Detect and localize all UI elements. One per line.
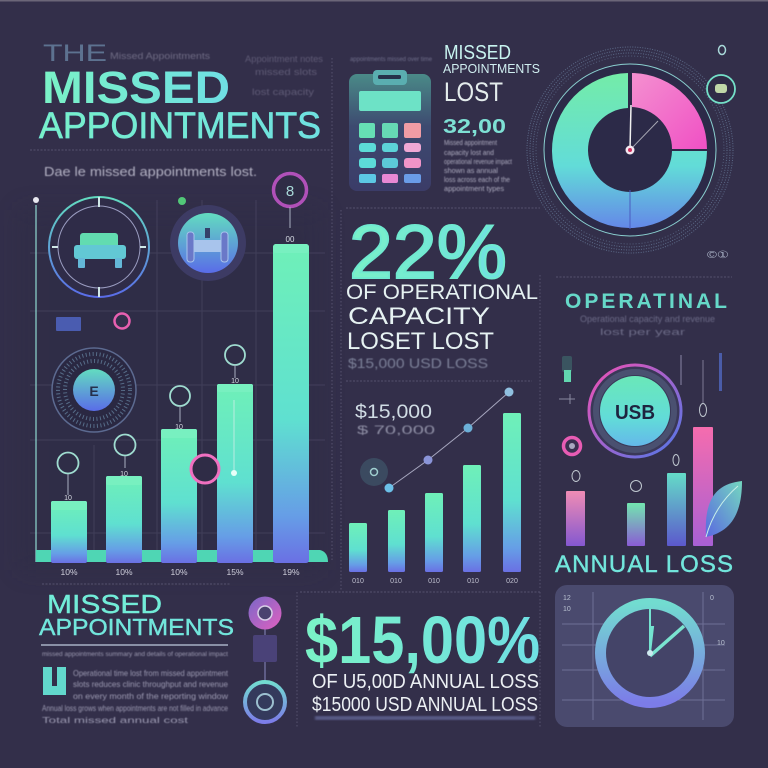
icon: chair badge <box>170 205 246 281</box>
body text bottom left: slots reduces clinic throughput and revenue <box>73 679 228 689</box>
statistic caption: OF OPERATIONAL <box>346 281 538 304</box>
line and bar chart: 010 <box>352 578 364 585</box>
title: MISSED <box>42 62 230 113</box>
body text: loss details: appointment types <box>444 184 504 193</box>
body text bottom left: Operational time lost from missed appointment <box>73 668 229 678</box>
heading: missed appointments bottom: MISSED <box>47 589 162 619</box>
statistic caption: LOSET LOST <box>347 328 494 355</box>
heading: missed appointments lost: 32,00 <box>443 116 506 138</box>
pink ring marker <box>191 455 219 483</box>
axis node <box>33 197 39 203</box>
icon: pink ring small <box>114 314 130 328</box>
statistic caption <box>346 281 538 355</box>
icon: leaf <box>706 481 742 537</box>
timeline icons <box>245 596 285 722</box>
statistic: 22%: 22% <box>349 210 507 295</box>
bar 1: 10 <box>64 495 72 502</box>
icon: u block <box>43 667 66 695</box>
icon: pink token <box>564 438 580 454</box>
clock face <box>600 604 700 702</box>
clock panel: 12 <box>563 595 571 602</box>
clock panel: 10 <box>563 606 571 613</box>
heading: missed appointments bottom <box>39 589 234 640</box>
bar 1 <box>51 452 87 563</box>
statistic caption bottom <box>312 671 539 716</box>
axis labels: 19% <box>282 567 300 577</box>
axis labels: 10% <box>170 567 188 577</box>
statistic caption bottom: OF U5,00D ANNUAL LOSS <box>312 671 539 693</box>
title <box>39 40 321 146</box>
heading: operatinal: OPERATINAL <box>565 290 727 313</box>
body text: loss details: capacity lost and <box>444 148 494 157</box>
axis labels: 15% <box>226 567 244 577</box>
faded loss note: $15,000 USD LOSS <box>348 355 488 371</box>
body text bottom left: missed appointments summary and details of operational impact <box>42 652 228 658</box>
line and bar chart <box>349 388 521 585</box>
body text: loss details <box>444 138 513 193</box>
icon: dotted dial: E <box>89 383 99 399</box>
body text: loss details: shown as annual <box>444 166 498 175</box>
calculator caption: appointments missed over time <box>350 57 433 63</box>
usd medallion <box>589 365 681 457</box>
heading: missed appointments lost: LOST <box>444 77 503 107</box>
line and bar chart: 010 <box>467 578 479 585</box>
bar 5: 00 <box>286 235 295 244</box>
bar 4: 10 <box>231 378 239 385</box>
bar 3 <box>161 386 197 563</box>
line and bar chart: 020 <box>506 578 518 585</box>
bar 4 <box>217 345 253 563</box>
donut segment: pink share <box>632 73 707 149</box>
faded operational note: Operational capacity and revenue <box>580 314 715 324</box>
title: Missed Appointments <box>110 51 211 61</box>
bar 5: 8 <box>286 183 294 200</box>
small note glyph: ©① <box>707 250 729 261</box>
right bar chart <box>566 353 722 546</box>
bar chart: missed appointments <box>36 174 328 577</box>
legend swatch <box>56 317 81 331</box>
faint title note <box>245 54 324 97</box>
bar 5 <box>273 174 309 563</box>
donut chart <box>527 47 733 253</box>
axis labels: 10% <box>115 567 133 577</box>
axis labels: 10% <box>60 567 78 577</box>
faded footnote <box>315 716 535 720</box>
body text: loss details: operational revenue impact <box>444 157 513 166</box>
clock panel: 0 <box>710 595 714 602</box>
heading: missed appointments lost <box>443 42 540 138</box>
icon: small device <box>559 356 575 404</box>
faded operational note <box>580 314 715 337</box>
bar 2: 10 <box>120 471 128 478</box>
heading: missed appointments bottom: APPOINTMENTS <box>39 614 234 640</box>
donut segment: green-blue share <box>552 73 707 228</box>
title: APPOINTMENTS <box>39 105 321 146</box>
icon: green dot <box>178 197 186 205</box>
line and bar chart: $15,000 <box>355 402 432 423</box>
faded operational note: lost per year <box>600 327 685 337</box>
clock panel <box>555 585 734 727</box>
icon: dotted dial <box>52 348 136 432</box>
heading: missed appointments lost: APPOINTMENTS <box>443 61 540 76</box>
faint title note: missed slots <box>255 67 318 77</box>
line and bar chart: 010 <box>390 578 402 585</box>
faint title note: lost capacity <box>252 87 315 97</box>
faint title note: Appointment notes <box>245 54 324 64</box>
icon: calculator <box>349 70 431 191</box>
icon: sofa ring <box>49 197 149 297</box>
usd medallion: USB <box>615 402 655 424</box>
body text: loss details: loss across each of the <box>444 175 510 184</box>
body text: loss details: Missed appointment <box>444 138 498 147</box>
bottom rules <box>41 644 228 646</box>
bar 3: 10 <box>175 424 183 431</box>
axis labels <box>60 567 300 577</box>
chart baseline strip <box>36 550 328 562</box>
statistic caption bottom: $15000 USD ANNUAL LOSS <box>312 694 538 716</box>
body text bottom left: Annual loss grows when appointments are not filled in advance <box>42 703 228 713</box>
body text bottom left <box>42 652 229 725</box>
statistic caption: CAPACITY <box>348 303 490 330</box>
heading: missed appointments lost: MISSED <box>444 42 511 64</box>
body text bottom left: Total missed annual cost <box>42 715 189 725</box>
line and bar chart: 010 <box>428 578 440 585</box>
clock panel: 10 <box>717 640 725 647</box>
heading: annual loss: ANNUAL LOSS <box>555 551 733 578</box>
line and bar chart: $ 70,000 <box>357 423 436 437</box>
subtitle: Dae le missed appointments lost. <box>44 164 257 179</box>
statistic: $15,00%: $15,00% <box>305 603 540 678</box>
title: THE <box>43 40 107 67</box>
icon: badge top right <box>707 46 735 103</box>
body text bottom left: on every month of the reporting window <box>73 691 229 701</box>
bar 2 <box>106 434 142 563</box>
